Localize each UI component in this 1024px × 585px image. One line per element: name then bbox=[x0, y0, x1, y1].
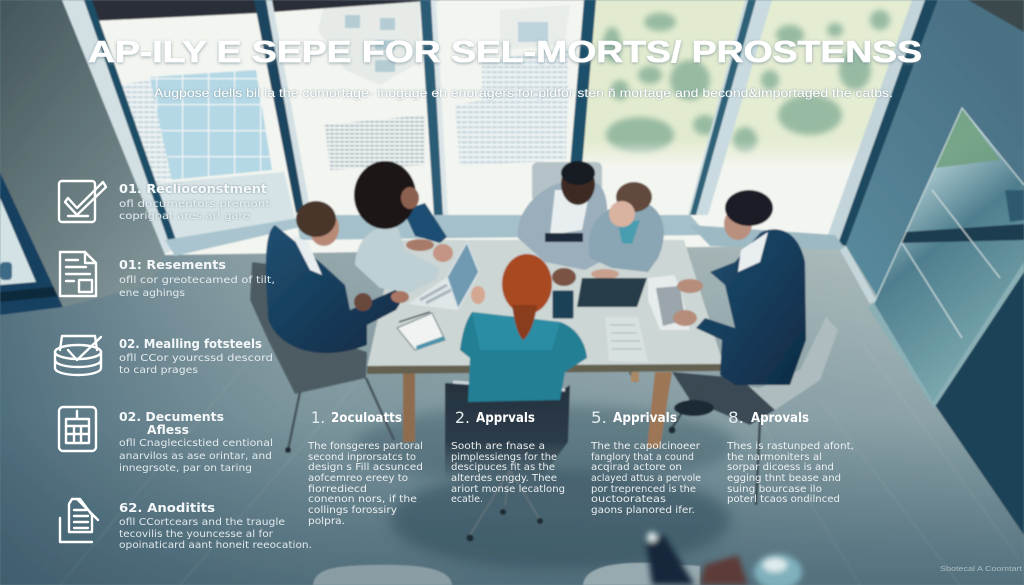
shoes of right man bbox=[674, 400, 714, 416]
open laptop bbox=[408, 242, 479, 310]
column 1: calculations: aofcemreo ereey to bbox=[308, 473, 408, 484]
column 3: approvals: acqirad actore on bbox=[591, 462, 682, 473]
column 1: calculations: design s Fill acsunced bbox=[308, 462, 423, 473]
item 3: mailing: to card prages bbox=[119, 365, 198, 376]
item 4: documents: Afless bbox=[147, 423, 189, 437]
item 3: mailing bbox=[55, 336, 273, 376]
column 1: calculations: conenon nors, if the bbox=[308, 494, 417, 505]
item 4: documents bbox=[59, 407, 273, 474]
column 1: calculations: second inprorsatcs to bbox=[308, 452, 416, 463]
meeting table bbox=[367, 240, 724, 374]
column 4: approvals: egging thnt bease and bbox=[727, 473, 841, 484]
column 3: approvals: 5. bbox=[591, 408, 607, 427]
left chair bbox=[250, 262, 394, 453]
man at back (grey jacket) bbox=[518, 161, 607, 286]
column 2: approvals: ariort monse lecatlong bbox=[451, 484, 565, 495]
left wall bbox=[0, 0, 165, 307]
dark ceiling corner bbox=[968, 0, 1024, 32]
column 3: approvals: aclayed attus a pervole bbox=[591, 473, 701, 484]
column 1: calculations: fiorrediecd bbox=[308, 484, 367, 495]
chair behind red-haired woman bbox=[445, 382, 570, 542]
item 2: requirements bbox=[60, 252, 275, 299]
item 4: documents: 02. Decuments bbox=[119, 410, 224, 424]
item 1: reconcilement: coprigoat ares arl gare bbox=[119, 211, 250, 222]
icon: coin stack with check bbox=[55, 336, 101, 375]
tablet bbox=[552, 290, 574, 319]
title: AP-ILY E SEPE FOR SEL-MORTS/ PROSTENSS bbox=[88, 34, 922, 69]
item 2: requirements: ofll cor greotecamed of tilt, bbox=[119, 275, 275, 286]
column 3: approvals: The the capolcinoeer bbox=[590, 441, 700, 452]
skirting bbox=[840, 246, 876, 304]
icon: document bbox=[60, 252, 96, 296]
right chair bbox=[630, 317, 838, 505]
floor bbox=[0, 240, 1024, 585]
table legs bbox=[403, 372, 672, 448]
window frame and mullions bbox=[62, 0, 938, 258]
right laptop bbox=[648, 275, 690, 330]
glass panel bbox=[868, 108, 1024, 408]
item 5: audits: opoinaticard aant honeit reeocation. bbox=[119, 540, 312, 551]
item 2: requirements: 01: Resements bbox=[119, 258, 226, 272]
column 4: approvals: Aprovals bbox=[751, 411, 809, 426]
watermark: Sbotecal A Coomtart bbox=[940, 564, 1023, 573]
column 4: approvals: poterl tcaos ondilnced bbox=[727, 494, 840, 505]
column 4: approvals: the narmoniters al bbox=[727, 452, 822, 463]
item 4: documents: ofll Cnaglecicstied centional bbox=[119, 438, 273, 449]
column 3: approvals: ouctoorateas bbox=[591, 494, 666, 505]
closed dark laptop bbox=[577, 278, 647, 307]
notebook bbox=[397, 312, 445, 350]
item 1: reconcilement bbox=[59, 181, 270, 222]
column 2: approvals: descipuces fit as the bbox=[451, 462, 555, 473]
item 5: audits: 62. Anoditits bbox=[119, 501, 215, 515]
lower-left side window bbox=[0, 172, 63, 315]
man in navy suit, left bbox=[266, 201, 409, 353]
column 4: approvals: sorpar dicoess is and bbox=[727, 462, 834, 473]
item 3: mailing: 02. Mealling fotsteels bbox=[119, 337, 262, 351]
item 1: reconcilement: 01. Reclioconstment bbox=[119, 182, 267, 196]
soft table shadow bbox=[355, 405, 735, 485]
item 5: audits bbox=[60, 499, 312, 551]
column 4: approvals: 8. bbox=[728, 408, 744, 427]
column 1: calculations: 1. bbox=[311, 408, 325, 427]
column 1: calculations: collings forossiry bbox=[308, 505, 397, 516]
item 2: requirements: ene aghings bbox=[119, 288, 185, 299]
icon: checkbox bbox=[59, 181, 106, 222]
item 3: mailing: ofll CCor yourcssd descord bbox=[119, 353, 273, 364]
column 1: calculations: The fonsgeres partoral bbox=[307, 441, 423, 452]
column 3: approvals: por treprenced is the bbox=[591, 484, 696, 495]
column 1: calculations: polpra. bbox=[308, 516, 345, 527]
column 4: approvals bbox=[726, 408, 854, 505]
man in navy suit, right bbox=[673, 190, 806, 385]
right wall bbox=[846, 0, 1024, 535]
woman at back right bbox=[589, 182, 664, 279]
dark right lower panel bbox=[933, 268, 1024, 535]
bottom foreground chairs bbox=[313, 563, 700, 585]
blinds bbox=[62, 0, 440, 21]
item 5: audits: tecovilis the youncesse al for bbox=[119, 529, 273, 540]
item 4: documents: innegrsote, par on taring bbox=[119, 463, 252, 474]
column 2: approvals: pimplessiengs for the bbox=[451, 452, 557, 463]
column 1: calculations bbox=[307, 408, 423, 527]
icon: folded document bbox=[60, 499, 98, 542]
item 5: audits: ofll CCortcears and the traugle bbox=[119, 517, 285, 528]
window panes with view bbox=[62, 0, 935, 255]
column 2: approvals: alterdes engdy. Thee bbox=[451, 473, 557, 484]
column 2: approvals: Sooth are fnase a bbox=[451, 441, 545, 452]
woman with curly hair bbox=[354, 161, 453, 293]
subtitle: Augpose dells bil la the comortage- inogage eh enoragers for pldfor sten ñ mortage and becond&importaged the catbs. bbox=[154, 86, 893, 100]
column 4: approvals: Thes is rastunped afont, bbox=[726, 441, 854, 452]
column 3: approvals: fanglory that a cound bbox=[591, 452, 694, 463]
column 2: approvals bbox=[451, 408, 565, 505]
column 4: approvals: suing bourcase ilo bbox=[727, 484, 822, 495]
column 3: approvals: gaons planored ifer. bbox=[591, 505, 695, 516]
bottom foreground blurred objects bbox=[646, 532, 802, 585]
red-haired woman from behind bbox=[460, 254, 587, 402]
paper sheet bbox=[605, 317, 648, 362]
item 4: documents: anarvilos as ase orintar, and bbox=[119, 451, 272, 462]
column 3: approvals bbox=[590, 408, 701, 516]
column 2: approvals: 2. bbox=[455, 408, 470, 427]
item 1: reconcilement: ofl documentors premont bbox=[119, 199, 270, 210]
column 2: approvals: ecatle. bbox=[451, 494, 483, 505]
column 1: calculations: 2oculoatts bbox=[331, 411, 402, 426]
icon: calendar bbox=[59, 407, 96, 451]
column 2: approvals: Apprvals bbox=[476, 411, 535, 426]
column 3: approvals: Apprivals bbox=[613, 411, 677, 426]
